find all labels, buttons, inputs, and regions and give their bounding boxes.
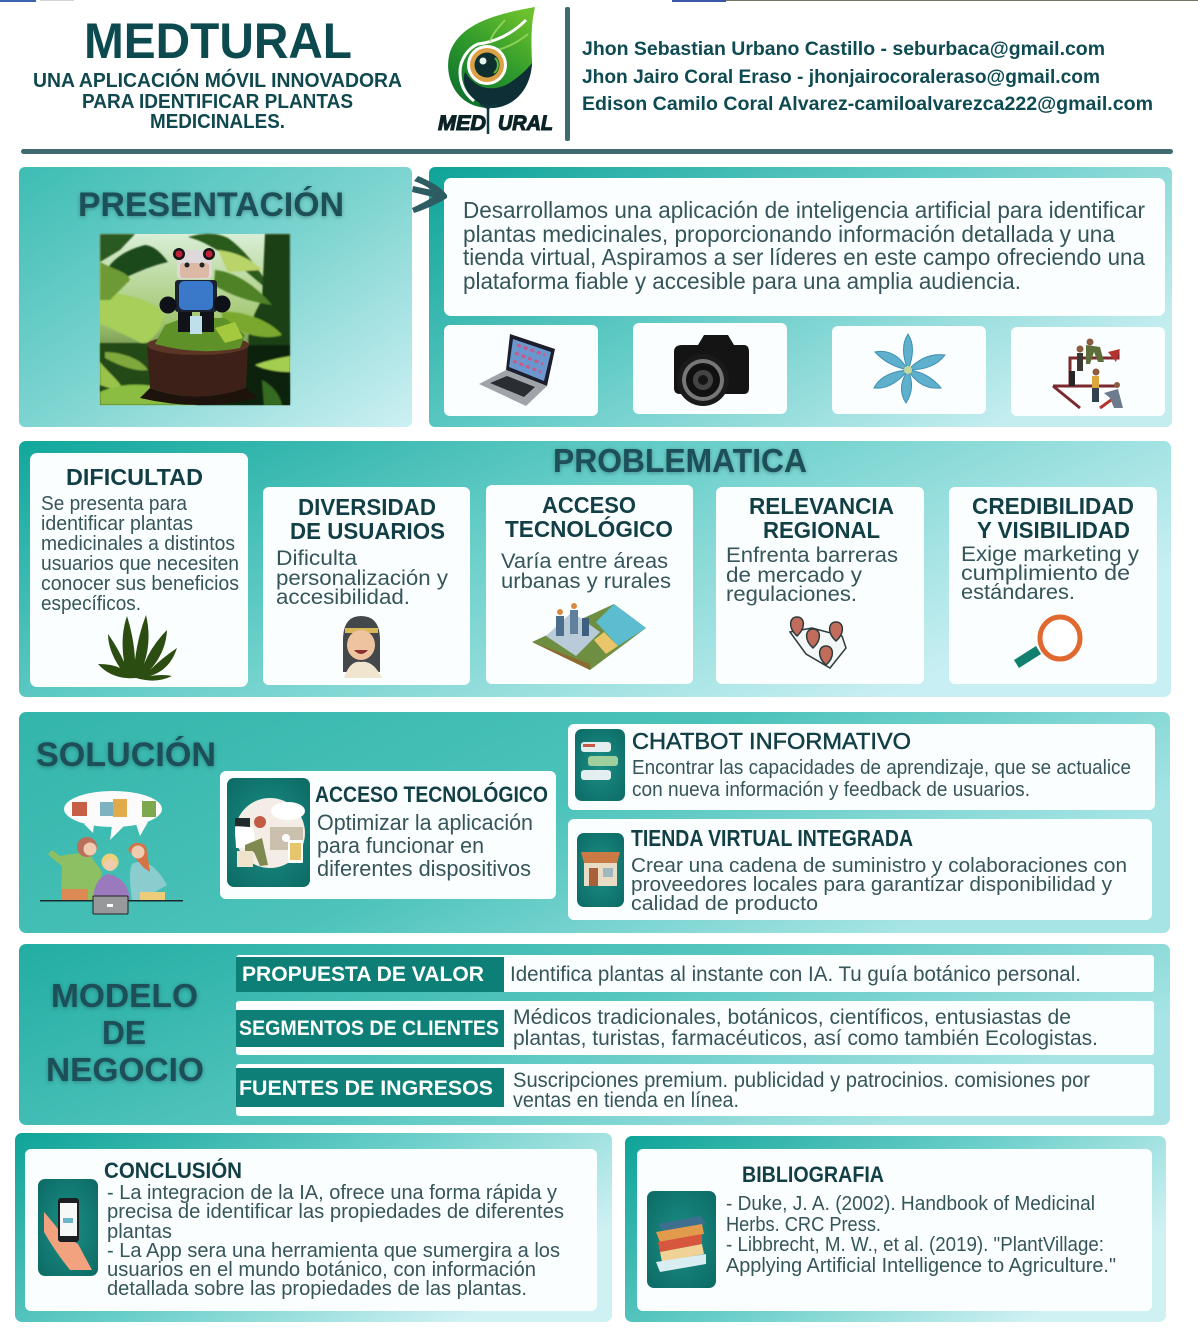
card: relevancia regional: de mercado y — [726, 564, 863, 587]
heading: modelo de negocio: DE — [102, 1014, 146, 1051]
row: fuentes de ingresos — [236, 1064, 1154, 1116]
panel: conclusión: CONCLUSIÓN — [104, 1158, 242, 1183]
logo wordmark: MED — [438, 112, 486, 135]
subtitle: UNA APLICACIÓN MÓVIL INNOVADORA — [33, 68, 402, 92]
card: laptop — [444, 325, 598, 416]
card: camera — [633, 323, 787, 414]
arrow — [412, 176, 447, 213]
heading: presentación: PRESENTACIÓN — [78, 186, 344, 224]
panel: conclusión: detallada sobre las propiedades de las plantas. — [107, 1278, 527, 1300]
card: relevancia regional: RELEVANCIA — [749, 493, 894, 519]
card: diversidad de usuarios: DIVERSIDAD — [298, 494, 436, 520]
card: chatbot informativo: Encontrar las capacidades de aprendizaje, que se actualice — [632, 757, 1131, 779]
card: relevancia regional: regulaciones. — [726, 583, 857, 606]
authors: Jhon Jairo Coral Eraso - jhonjairocoraleraso@gmail.com — [582, 66, 1100, 88]
row: segmentos de clientes: Médicos tradicionales, botánicos, científicos, entusiastas de — [513, 1006, 1071, 1029]
icon: books — [647, 1191, 716, 1288]
panel: problemática — [19, 441, 1171, 697]
top edge strip — [0, 0, 1198, 2]
card: dificultad — [30, 453, 248, 687]
card: chatbot informativo — [568, 724, 1155, 810]
subtitle — [33, 68, 402, 133]
panel: bibliografía — [625, 1136, 1166, 1322]
card: acceso tecnológico: Varía entre áreas — [501, 550, 668, 573]
card: dificultad: Se presenta para — [41, 493, 188, 515]
icon: magnifier — [1014, 617, 1080, 668]
title: MEDTURAL — [84, 13, 352, 69]
card: acceso tecnológico: ACCESO — [542, 492, 636, 518]
image: robot in plants — [100, 234, 290, 405]
card: dificultad: DIFICULTAD — [66, 464, 203, 490]
card: credibilidad y visibilidad: CREDIBILIDAD — [972, 493, 1134, 519]
card: diversidad de usuarios: personalización y — [276, 567, 449, 590]
card: acceso tecnológico: diferentes dispositivos — [317, 856, 531, 881]
card: tienda virtual: calidad de producto — [631, 892, 818, 915]
card: descripción — [444, 178, 1165, 316]
row: segmentos de clientes: SEGMENTOS DE CLIENTES — [239, 1017, 499, 1040]
card: descripción: plantas medicinales, proporcionando información detallada y una — [463, 221, 1115, 247]
panel: bibliografía: Herbs. CRC Press. — [726, 1214, 881, 1236]
header divider vertical — [565, 7, 570, 141]
card: relevancia regional: REGIONAL — [763, 517, 880, 543]
header title block — [33, 13, 402, 133]
panel: conclusión — [15, 1133, 612, 1322]
card: descripción: Desarrollamos una aplicación de inteligencia artificial para identificar — [463, 197, 1145, 223]
icon: hand with phone — [38, 1179, 98, 1276]
icon: woman — [343, 616, 382, 678]
row: propuesta de valor: Identifica plantas al instante con IA. Tu guía botánico personal. — [510, 963, 1081, 986]
card: credibilidad y visibilidad: Y VISIBILIDAD — [977, 517, 1130, 543]
card: acceso tecnológico — [486, 485, 693, 684]
card: tienda virtual: proveedores locales para garantizar disponibilidad y — [631, 873, 1113, 896]
panel: bibliografía: Applying Artificial Intelligence to Agriculture." — [726, 1255, 1116, 1277]
card: dificultad: medicinales a distintos — [41, 533, 235, 555]
card: acceso tecnológico: urbanas y rurales — [501, 570, 671, 593]
icon: map pins — [790, 617, 846, 668]
panel: conclusión: - La integracion de la IA, ofrece una forma rápida y — [107, 1182, 557, 1204]
card: dificultad: específicos. — [41, 593, 141, 615]
card: tienda virtual: TIENDA VIRTUAL INTEGRADA — [631, 825, 913, 851]
icon: person with devices — [227, 778, 310, 887]
row: propuesta de valor: PROPUESTA DE VALOR — [242, 963, 484, 986]
card: descripción: plataforma fiable y accesible para una amplia audiencia. — [463, 268, 1021, 294]
panel: bibliografía: BIBLIOGRAFIA — [742, 1162, 884, 1187]
heading: modelo de negocio: MODELO — [51, 977, 198, 1014]
logo wordmark — [438, 104, 553, 135]
card: acceso tecnológico: ACCESO TECNOLÓGICO — [315, 782, 548, 807]
panel: bibliografía: - Duke, J. A. (2002). Handbook of Medicinal — [726, 1193, 1095, 1215]
card: teamwork — [1011, 327, 1165, 416]
card: dificultad: usuarios que necesiten — [41, 553, 239, 575]
authors: Jhon Sebastian Urbano Castillo - seburbaca@gmail.com — [582, 38, 1105, 60]
logo: leaf with eye — [438, 7, 553, 135]
card: chatbot informativo: con nueva información y feedback de usuarios. — [632, 779, 1030, 801]
card: credibilidad y visibilidad: estándares. — [961, 581, 1075, 604]
illustration: team with puzzle — [40, 791, 183, 914]
row: fuentes de ingresos: FUENTES DE INGRESOS — [239, 1077, 493, 1100]
card: diversidad de usuarios — [263, 487, 470, 685]
panel: modelo de negocio — [19, 944, 1170, 1125]
logo wordmark: URAL — [498, 112, 553, 135]
card: descripción: tienda virtual, Aspiramos a ser líderes en este campo ofreciendo una — [463, 244, 1145, 270]
panel: solución — [19, 712, 1170, 933]
card: acceso tecnológico: TECNOLÓGICO — [505, 515, 673, 542]
card: diversidad de usuarios: DE USUARIOS — [290, 518, 445, 544]
row: segmentos de clientes: plantas, turistas, farmacéuticos, así como también Ecologistas. — [513, 1027, 1098, 1050]
card: relevancia regional: Enfrenta barreras — [726, 544, 898, 567]
heading: solución: SOLUCIÓN — [36, 736, 216, 774]
panel: conclusión: precisa de identificar las propiedades de diferentes — [107, 1201, 564, 1223]
card: flower — [832, 326, 986, 414]
card: diversidad de usuarios: accesibilidad. — [276, 586, 410, 609]
card: chatbot informativo: CHATBOT INFORMATIVO — [632, 728, 911, 754]
authors — [582, 38, 1153, 115]
card: tienda virtual: Crear una cadena de suministro y colaboraciones con — [631, 854, 1127, 877]
icon: plant — [98, 615, 177, 681]
row: propuesta de valor — [236, 955, 1154, 992]
panel: conclusión: - La App sera una herramienta que sumergira a los — [107, 1240, 560, 1262]
card: acceso tecnológico — [220, 771, 556, 899]
card: acceso tecnológico: para funcionar en — [317, 833, 484, 858]
authors: Edison Camilo Coral Alvarez-camiloalvarezca222@gmail.com — [582, 93, 1153, 115]
card: dificultad: conocer sus beneficios — [41, 573, 239, 595]
card: tienda virtual — [568, 819, 1152, 920]
panel: conclusión: plantas — [107, 1221, 172, 1243]
panel: conclusión: usuarios en el mundo botánico, con información — [107, 1259, 536, 1281]
header divider horizontal — [21, 149, 1173, 154]
row: fuentes de ingresos: ventas en tienda en línea. — [513, 1089, 739, 1112]
panel: descripción — [429, 167, 1172, 427]
heading: modelo de negocio: NEGOCIO — [46, 1051, 204, 1088]
card: credibilidad y visibilidad: cumplimiento de — [961, 562, 1130, 585]
icon: chat — [575, 729, 625, 801]
icon: store — [577, 833, 624, 907]
row: fuentes de ingresos: Suscripciones premium. publicidad y patrocinios. comisiones por — [513, 1069, 1090, 1092]
heading: modelo de negocio — [46, 977, 204, 1088]
card: credibilidad y visibilidad — [949, 487, 1157, 684]
card: credibilidad y visibilidad: Exige marketing y — [961, 543, 1140, 566]
card: diversidad de usuarios: Dificulta — [276, 547, 357, 570]
card: dificultad: identificar plantas — [41, 513, 193, 535]
subtitle: MEDICINALES. — [150, 111, 285, 133]
panel: bibliografía: - Libbrecht, M. W., et al. (2019). "PlantVillage: — [726, 1234, 1104, 1256]
subtitle: PARA IDENTIFICAR PLANTAS — [82, 91, 353, 113]
heading: problemática: PROBLEMATICA — [553, 442, 807, 479]
row: segmentos de clientes — [236, 1001, 1154, 1055]
icon: city map — [532, 603, 646, 670]
robot figure — [160, 248, 230, 334]
card: relevancia regional — [716, 487, 924, 684]
panel: presentación — [19, 167, 412, 427]
card: acceso tecnológico: Optimizar la aplicación — [317, 810, 533, 835]
